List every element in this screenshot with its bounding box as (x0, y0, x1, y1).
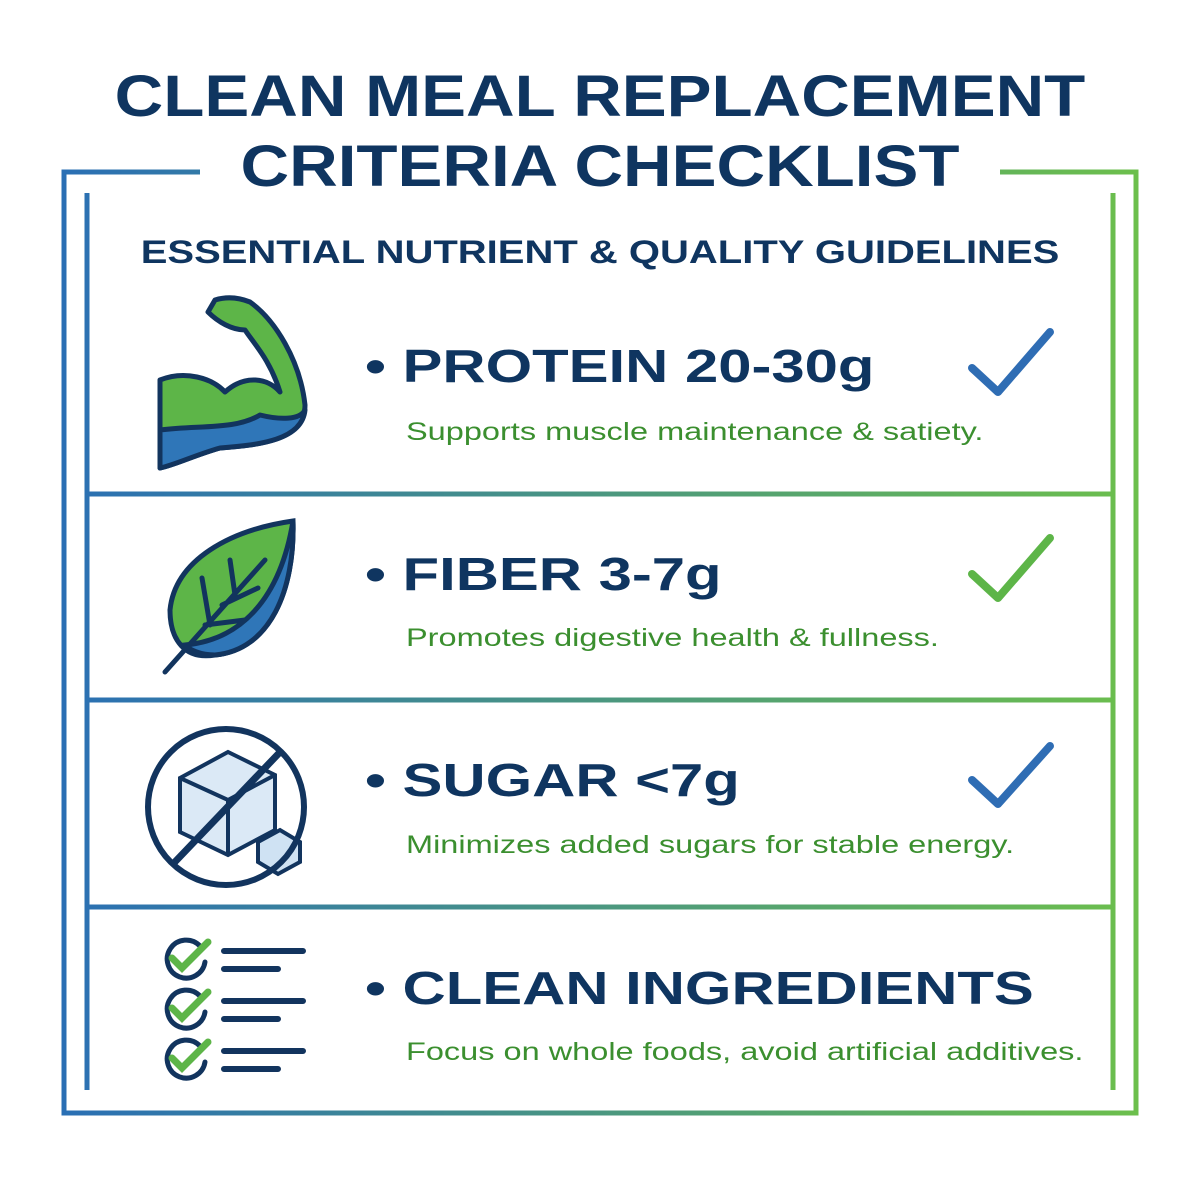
row 4 heading: • CLEAN INGREDIENTS (365, 962, 1034, 1014)
icon: flexed arm (160, 298, 305, 468)
row 2 heading: • FIBER 3-7g (365, 548, 722, 600)
icon: no sugar (148, 729, 304, 885)
title (115, 64, 1085, 199)
icon: checklist (167, 940, 303, 1078)
row 4 text: Focus on whole foods, avoid artificial additives. (406, 1038, 1083, 1066)
checkmark 3 (972, 746, 1050, 804)
title: CRITERIA CHECKLIST (241, 134, 959, 199)
row 3 heading: • SUGAR <7g (365, 754, 740, 806)
row 2 text: Promotes digestive health & fullness. (406, 624, 939, 652)
subtitle: ESSENTIAL NUTRIENT & QUALITY GUIDELINES (141, 234, 1059, 270)
row 1 text: Supports muscle maintenance & satiety. (406, 418, 983, 446)
row 3 text: Minimizes added sugars for stable energy. (406, 831, 1014, 859)
icon: leaf (165, 521, 293, 672)
checkmark 1 (972, 332, 1050, 392)
title: CLEAN MEAL REPLACEMENT (115, 64, 1085, 129)
checkmark 2 (972, 538, 1050, 598)
row 1 heading: • PROTEIN 20-30g (365, 340, 874, 392)
